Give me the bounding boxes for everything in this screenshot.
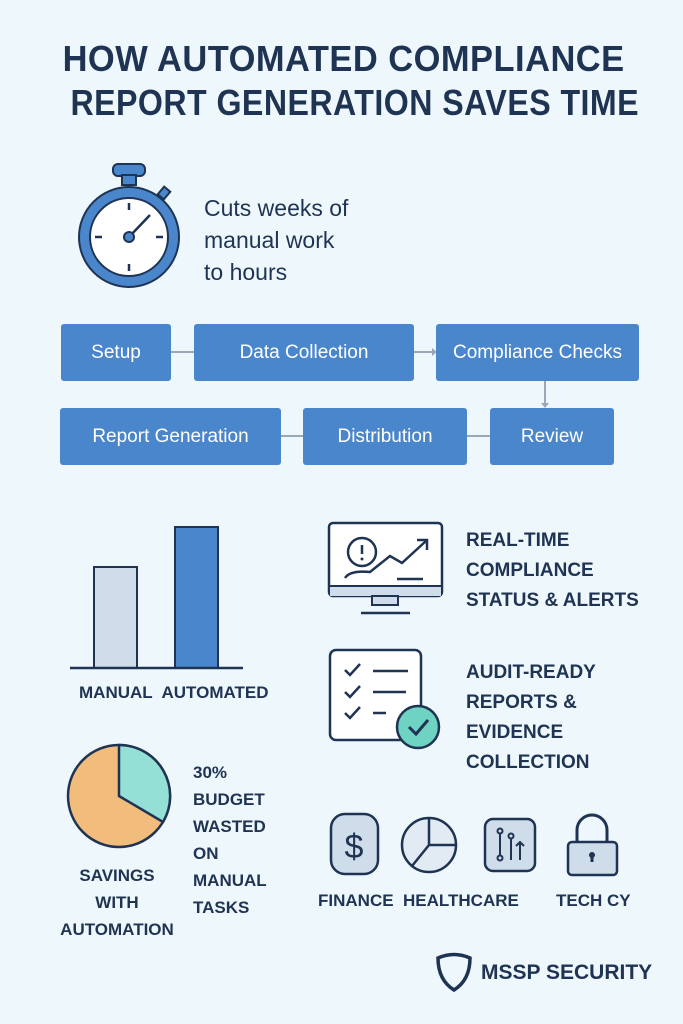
flow: Review <box>490 408 614 465</box>
flow: Setup <box>61 324 171 381</box>
text: audit-ready <box>466 662 596 773</box>
text: real-time: COMPLIANCE <box>466 560 594 581</box>
text: 30% budget: WASTED <box>193 817 266 836</box>
pie chart <box>66 744 172 848</box>
bar chart <box>70 526 243 670</box>
bar labels: MANUAL AUTOMATED <box>79 683 268 702</box>
text: 30% budget: ON <box>193 844 218 863</box>
text: audit-ready: EVIDENCE <box>466 722 563 743</box>
logo <box>436 952 652 992</box>
flow: Review: Review <box>521 426 583 446</box>
icon: stopwatch <box>78 163 180 288</box>
flow: Compliance Checks <box>436 324 639 381</box>
text: real-time: REAL-TIME <box>466 530 569 551</box>
title: HOW AUTOMATED COMPLIANCE <box>63 38 625 79</box>
text: 30% budget <box>193 763 267 917</box>
text: savings <box>60 866 174 939</box>
industry icons <box>330 812 618 876</box>
flow: Data Collection: Data Collection <box>240 342 368 362</box>
logo: MSSP SECURITY <box>481 961 652 984</box>
text: real-time <box>466 530 639 611</box>
text: cuts weeks: manual work <box>204 227 334 253</box>
flow: Distribution: Distribution <box>337 426 433 446</box>
text: cuts weeks: to hours <box>204 259 287 285</box>
title: REPORT GENERATION SAVES TIME <box>70 82 639 123</box>
flow: Compliance Checks: Compliance Checks <box>453 342 622 362</box>
text: cuts weeks: Cuts weeks of <box>204 195 348 221</box>
title <box>63 38 639 123</box>
icon: shield <box>436 952 472 992</box>
text: 30% budget: MANUAL <box>193 871 267 890</box>
industry icons: $ <box>345 828 364 866</box>
flow: Report Generation <box>60 408 281 465</box>
industry labels: FINANCE HEALTHCARE <box>318 891 519 910</box>
label: tech cy: TECH CY <box>556 891 631 910</box>
text: audit-ready: REPORTS & <box>466 692 577 713</box>
text: real-time: STATUS & ALERTS <box>466 590 639 611</box>
text: audit-ready: AUDIT-READY <box>466 662 596 683</box>
text: 30% budget: BUDGET <box>193 790 265 809</box>
text: audit-ready: COLLECTION <box>466 752 590 773</box>
text: 30% budget: 30% <box>193 763 227 782</box>
text: savings: SAVINGS <box>79 866 155 885</box>
icon: checklist <box>328 648 440 750</box>
icon: monitor <box>328 522 444 614</box>
flow: Distribution <box>303 408 467 465</box>
flow: Report Generation: Report Generation <box>92 426 249 446</box>
text: cuts weeks <box>204 195 348 285</box>
flow: Data Collection <box>194 324 414 381</box>
text: 30% budget: TASKS <box>193 898 249 917</box>
text: savings: AUTOMATION <box>60 920 174 939</box>
flow: Setup: Setup <box>91 342 141 362</box>
text: savings: WITH <box>95 893 139 912</box>
flow connectors <box>171 348 549 437</box>
